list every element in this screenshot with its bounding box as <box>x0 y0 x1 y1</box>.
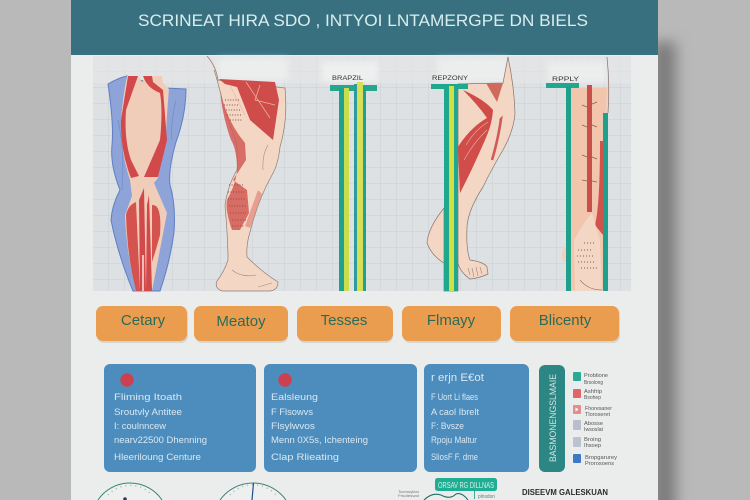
panel: info card 1: Fliming Itoath <box>114 392 182 403</box>
panel: info card 3: r erjn E€ot <box>431 372 484 384</box>
panel: vertical teal label: BASMONENGSLMAIE <box>548 374 558 462</box>
header banner <box>71 0 658 55</box>
bar label: RPPLY <box>552 77 579 83</box>
figure: rear leg with measuring bar <box>546 57 609 291</box>
panel: info card 1 <box>104 364 256 472</box>
lower right heading: DISEEVM GALESKUAN <box>522 488 608 497</box>
legend item: light grey: Broing <box>584 437 601 443</box>
panel: info card 1: I: coulnncew <box>114 421 166 432</box>
panel: info card 3: Rpoju Maltur <box>431 435 477 446</box>
panel: info card 3: F: Bvsze <box>431 421 464 432</box>
figure: front leg with blue outer tissue <box>108 76 186 291</box>
legend item: pink <box>573 405 612 418</box>
button: Meatoy: Meatoy <box>216 313 266 330</box>
small note <box>398 489 419 498</box>
button: Flmayy: Flmayy <box>427 312 476 329</box>
legend item: grey: Iwsoslat <box>584 427 603 433</box>
panel: info card 2 <box>264 364 417 472</box>
panel: info card 3: SliosF F. dme <box>431 452 478 463</box>
legend item: red <box>573 389 602 401</box>
panel: info card 2: Flsylwvos <box>271 421 315 432</box>
button: Tesses <box>297 306 393 341</box>
legend item: grey: Abosse <box>584 421 603 427</box>
title: SCRINEAT HIRA SDO , INTYOI LNTAMERGPE DN BIELS <box>138 12 588 30</box>
wave chart <box>424 491 495 500</box>
legend item: red: Bsohep <box>584 395 601 401</box>
panel: anatomy chart <box>93 56 631 291</box>
legend item: pink: Tloroseret <box>585 412 610 418</box>
button: Flmayy <box>402 306 501 341</box>
button: Tesses: Tesses <box>321 312 367 329</box>
legend item: teal <box>573 372 608 386</box>
figure: bent leg with measuring bar <box>427 57 515 291</box>
legend item: light grey <box>573 437 601 449</box>
legend item: blue <box>573 454 617 467</box>
panel: info card 2: F Flsowvs <box>271 407 313 418</box>
panel: info card 3 <box>424 364 529 472</box>
legend item: teal: Probtione <box>584 373 608 379</box>
panel: info card 1: Sroutvly Antitee <box>114 407 182 418</box>
button: Blicenty <box>510 306 619 341</box>
panel: info card 3: A caol Ibrelt <box>431 407 479 418</box>
figure: measuring bars 1 <box>330 76 377 291</box>
button: Blicenty: Blicenty <box>539 312 592 329</box>
legend item: red: Ashfrip <box>584 389 602 395</box>
panel: info card 3: F Uort Li flaes <box>431 392 478 403</box>
legend item: light grey: Ihsoep <box>584 443 601 449</box>
legend <box>573 372 617 467</box>
panel: info card 2: Menn 0X5s, Ichenteing <box>271 435 368 446</box>
panel: info card 2: Ealsleung <box>271 392 318 403</box>
legend item: teal: Brsolong <box>584 380 603 386</box>
gauge 1 <box>98 483 162 500</box>
bar label: REPZONY <box>432 76 468 82</box>
teal chart label <box>435 478 497 491</box>
panel: info card 1: Hleeriloung Centure <box>114 452 201 463</box>
button: Meatoy <box>194 306 288 341</box>
category buttons <box>96 306 620 343</box>
wave chart: plnsdon <box>478 494 495 500</box>
panel: vertical teal label <box>539 365 565 472</box>
panel: info card 1: nearv22500 Dhenning <box>114 435 207 446</box>
legend item: pink: Fhoresaner <box>585 406 612 412</box>
button: Cetary: Cetary <box>121 312 166 329</box>
legend item: grey <box>573 420 603 433</box>
teal chart label: ORSAV RG DILLNAS <box>438 481 494 490</box>
small note: Tcomoytlon <box>398 489 419 494</box>
gauge 2 <box>220 483 286 500</box>
button: Cetary <box>96 306 187 341</box>
bar label: BRAPZIL <box>332 76 364 82</box>
legend item: blue: Bropgarurey <box>585 455 617 461</box>
legend item: blue: Prorosoens <box>585 461 614 467</box>
page sheet <box>71 0 658 500</box>
panel: info card 2: Clap Rlieating <box>271 452 339 463</box>
figure: side leg with muscle <box>207 56 286 291</box>
small note: Frsoteswol <box>398 493 419 498</box>
